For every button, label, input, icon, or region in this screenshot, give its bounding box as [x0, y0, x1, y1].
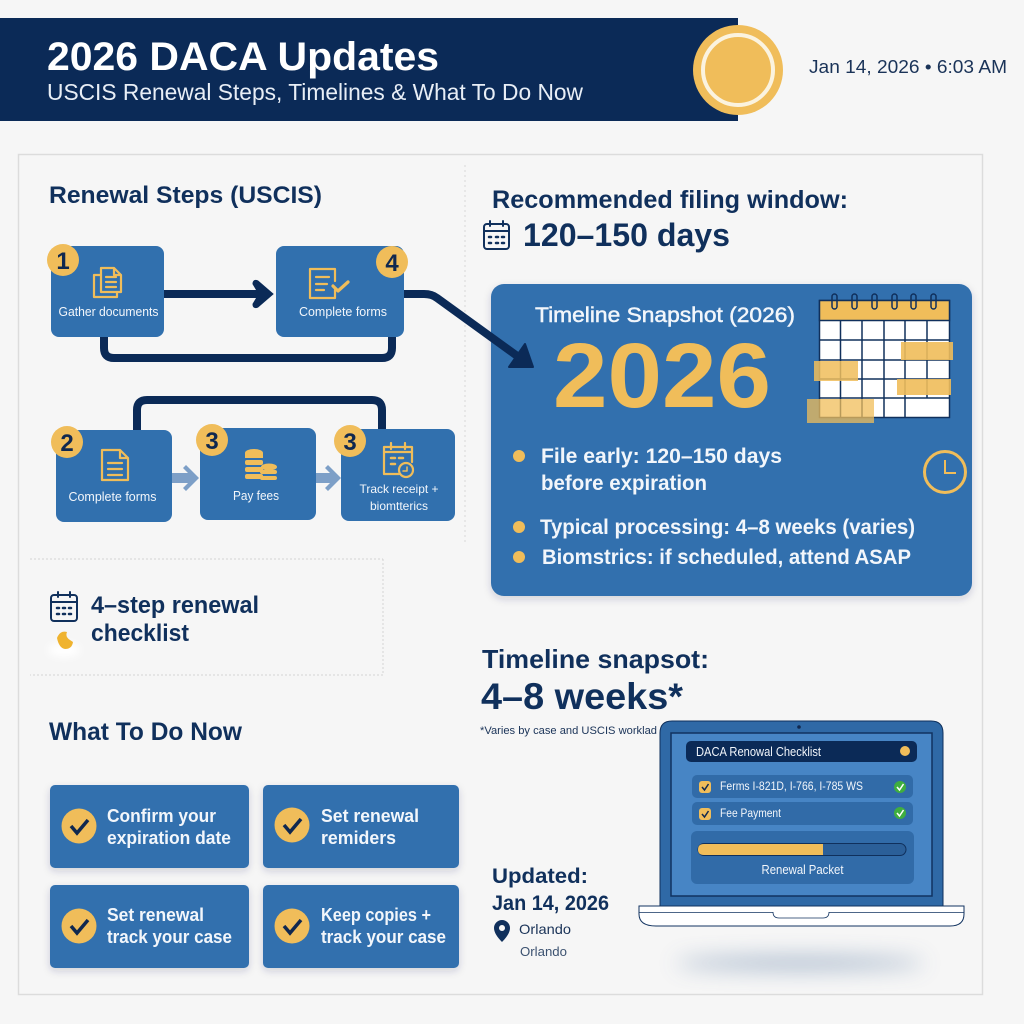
arrow: step 2 to pay fees: [172, 465, 199, 491]
action card: keep copies: Keep copies +: [321, 905, 431, 925]
laptop base: [639, 906, 964, 926]
checklist label: 4–step renewal: [91, 592, 259, 619]
location: Orlando: [519, 921, 571, 937]
progress panel: Renewal Packet: [762, 863, 844, 877]
card heading: Timeline Snapshot (2026): [535, 304, 795, 327]
action card: set renewal track case: track your case: [107, 927, 232, 947]
bullet: file early: [513, 445, 782, 495]
subtitle: USCIS Renewal Steps, Timelines & What To Do Now: [47, 79, 583, 105]
badge 4: 4: [385, 250, 399, 277]
connector: lower loop: [137, 400, 382, 431]
step card: complete forms (2): [51, 426, 172, 522]
row: fee payment: Fee Payment: [720, 808, 782, 820]
row: forms: [692, 775, 913, 798]
laptop illustration: [639, 721, 964, 926]
action card: confirm expiration: expiration date: [107, 828, 231, 848]
checklist callout box: [30, 559, 383, 675]
action card: keep copies: track your case: [321, 927, 446, 947]
icon: check: [274, 908, 310, 944]
step card: pay fees: [196, 424, 316, 520]
action card: confirm expiration: Confirm your: [107, 806, 216, 826]
icon: calendar: [51, 592, 77, 621]
updated block: Updated:: [492, 865, 588, 888]
checklist label: checklist: [91, 620, 189, 647]
arrow: step 1 to step 4: [164, 280, 273, 308]
icon: check: [62, 808, 96, 844]
checklist title bar: [686, 741, 917, 762]
bullet: file early: File early: 120–150 days: [541, 445, 782, 468]
updated block: Jan 14, 2026: [492, 892, 609, 915]
action card: renewal reminders: Set renewal: [321, 806, 419, 826]
connector: step 1 loop to step 4: [104, 336, 392, 358]
step card: complete forms (4): Complete forms: [299, 305, 387, 319]
step card: gather documents: [47, 244, 164, 337]
badge 3: 3: [343, 429, 357, 456]
icon: check: [274, 808, 310, 842]
row: fee payment: [692, 802, 913, 825]
icon: document: [102, 450, 128, 480]
calendar illustration: [807, 294, 953, 423]
row: forms: Ferms I-821D, I-766, I-785 WS: [720, 781, 863, 793]
updated block: [492, 865, 609, 959]
heading: timeline snapshot: Timeline snapsot:: [482, 644, 709, 674]
progress panel: [691, 831, 914, 884]
heading: renewal steps: Renewal Steps (USCIS): [49, 182, 322, 209]
step card: complete forms (2): Complete forms: [68, 490, 156, 504]
bullet: biometrics: Biomstrics: if scheduled, attend ASAP: [542, 546, 911, 569]
bullet: typical processing: Typical processing: 4–8 weeks (varies): [540, 516, 915, 539]
step card: track receipt + biometrics: [334, 425, 455, 521]
action card: set renewal track case: Set renewal: [107, 905, 204, 925]
title: 2026 DACA Updates: [47, 35, 439, 79]
badge 3: 3: [205, 428, 219, 455]
icon: documents: [94, 268, 121, 297]
bullet: file early: before expiration: [541, 472, 707, 495]
action card: renewal reminders: remiders: [321, 828, 396, 848]
icon: clock: [924, 452, 966, 492]
arrow: pay fees to track receipt: [316, 465, 341, 491]
date and time: Jan 14, 2026 • 6:03 AM: [809, 57, 1007, 77]
icon: calendar with clock: [384, 443, 413, 477]
checklist title bar: DACA Renowal Checklist: [696, 745, 821, 759]
action card: renewal reminders: [263, 785, 459, 868]
laptop shadow: [675, 957, 925, 969]
badge 1: 1: [56, 248, 70, 275]
step card: pay fees: Pay fees: [233, 489, 279, 503]
step card: gather documents: Gather documents: [58, 305, 158, 319]
step card: track receipt + biometrics: Track receipt +: [360, 482, 438, 496]
icon: gold mark: [48, 632, 80, 657]
column divider: [464, 165, 466, 545]
action card: confirm expiration: [50, 785, 249, 868]
icon: calendar: [484, 221, 509, 249]
filing window value: 120–150 days: [523, 217, 730, 253]
action card: keep copies: [263, 885, 459, 968]
location repeated: Orlando: [520, 944, 567, 959]
value: weeks: 4–8 weeks*: [481, 676, 684, 717]
icon: gold sun emblem: [693, 25, 783, 115]
icon: form with check: [310, 269, 348, 298]
arrow: step 4 to timeline card: [404, 294, 533, 367]
panel: timeline snapshot card: [491, 284, 972, 596]
footnote: *Varies by case and USCIS worklad: [480, 725, 657, 737]
icon: check: [62, 908, 96, 944]
action card: set renewal track case: [50, 885, 249, 968]
step card: track receipt + biometrics: biomtterics: [370, 499, 428, 513]
heading: what to do now: What To Do Now: [49, 718, 243, 746]
icon: location pin: [494, 920, 510, 942]
step card: complete forms (4): [276, 246, 408, 337]
main panel frame: [18, 154, 982, 994]
heading: recommended filing window: Recommended filing window:: [492, 186, 848, 214]
icon: coins: [245, 449, 277, 480]
big year: 2026: [553, 325, 771, 427]
header banner: [0, 18, 738, 121]
badge 2: 2: [60, 430, 74, 457]
